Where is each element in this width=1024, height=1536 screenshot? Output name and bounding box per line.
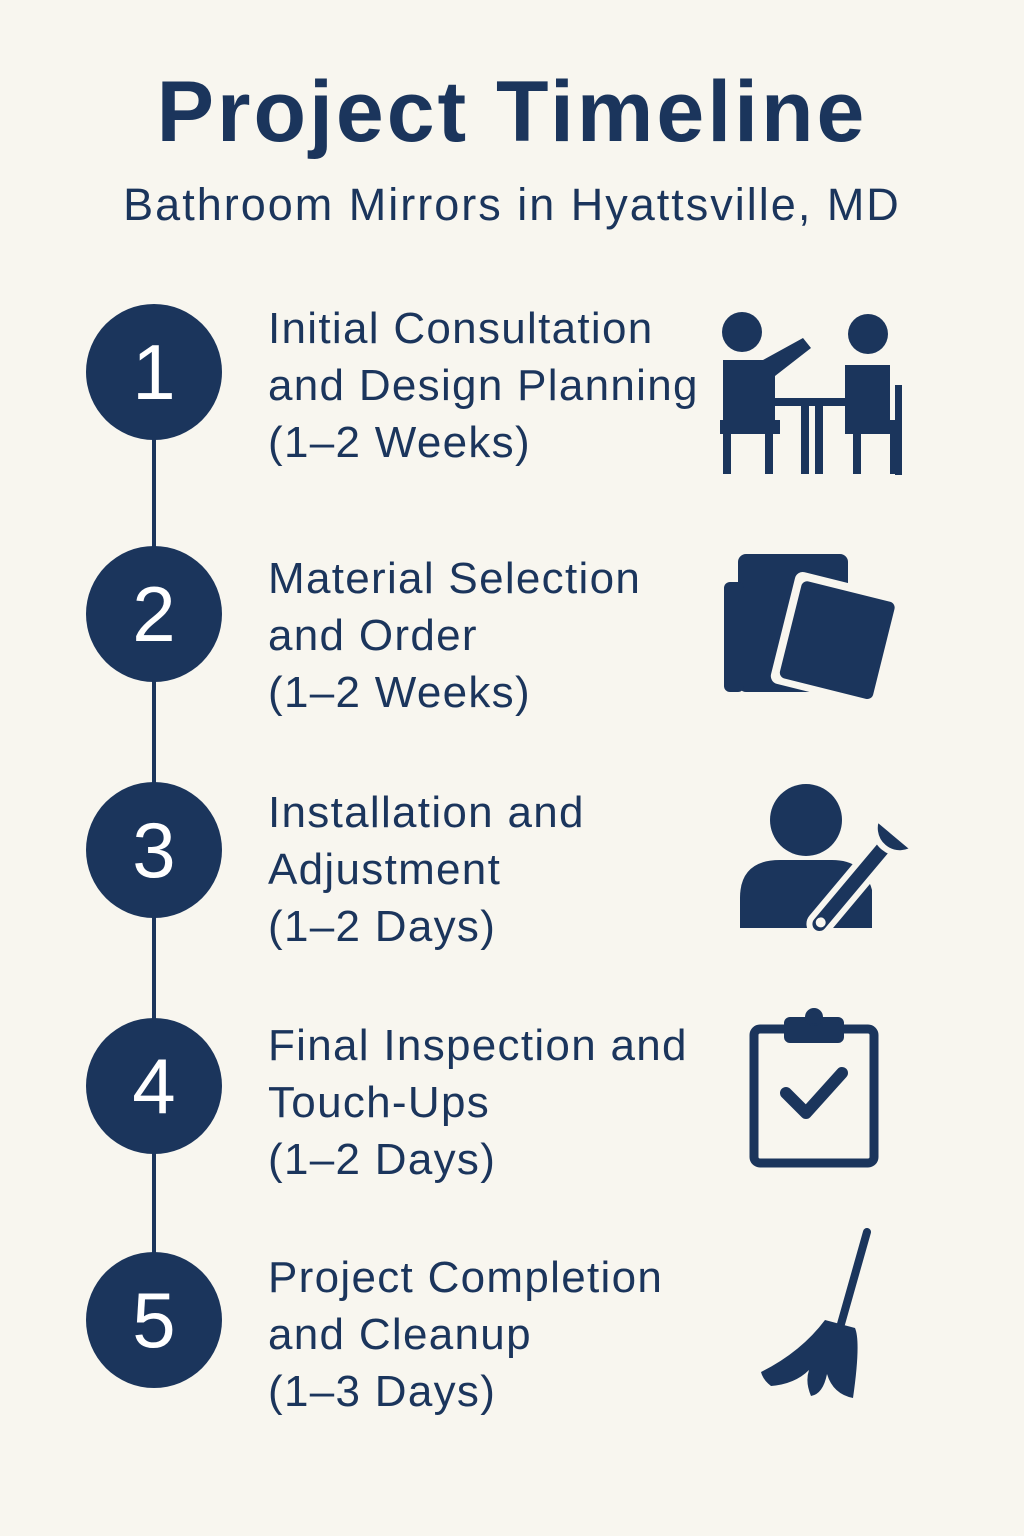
- step 5 text: and Cleanup: [268, 1310, 532, 1359]
- step 3 text: Installation and: [268, 788, 585, 837]
- step 4 text: Touch-Ups: [268, 1078, 490, 1127]
- step 3 text: [268, 788, 585, 951]
- step 1 number: [86, 304, 222, 440]
- step 4 number: [86, 1018, 222, 1154]
- step 4 text: Final Inspection and: [268, 1021, 688, 1070]
- step 2 number: 2: [132, 570, 176, 658]
- timeline line: [152, 372, 156, 1322]
- step 2 number: [86, 546, 222, 682]
- step 5 text: Project Completion: [268, 1253, 663, 1302]
- icon: clipboard: [750, 1008, 878, 1168]
- step 5 text: (1–3 Days): [268, 1367, 496, 1416]
- icon: consultation: [720, 312, 902, 475]
- step 1 text: and Design Planning: [268, 361, 699, 410]
- step 2 text: and Order: [268, 611, 478, 660]
- step 3 text: (1–2 Days): [268, 902, 496, 951]
- step 2 text: Material Selection: [268, 554, 641, 603]
- icon: materials: [724, 554, 895, 699]
- step 3 number: 3: [132, 806, 176, 894]
- step 5 text: [268, 1253, 663, 1416]
- title: Project Timeline: [157, 64, 867, 160]
- step 5 number: 5: [132, 1276, 176, 1364]
- step 1 text: (1–2 Weeks): [268, 418, 531, 467]
- icon: broom: [761, 1228, 871, 1398]
- step 4 text: [268, 1021, 688, 1184]
- step 1 text: Initial Consultation: [268, 304, 654, 353]
- step 2 text: (1–2 Weeks): [268, 668, 531, 717]
- step 3 text: Adjustment: [268, 845, 501, 894]
- step 1 text: [268, 304, 699, 467]
- step 3 number: [86, 782, 222, 918]
- step 1 number: 1: [132, 328, 176, 416]
- icon: installer: [740, 784, 908, 931]
- step 4 number: 4: [132, 1042, 176, 1130]
- subtitle: Bathroom Mirrors in Hyattsville, MD: [123, 179, 901, 230]
- step 5 number: [86, 1252, 222, 1388]
- step 4 text: (1–2 Days): [268, 1135, 496, 1184]
- step 2 text: [268, 554, 641, 717]
